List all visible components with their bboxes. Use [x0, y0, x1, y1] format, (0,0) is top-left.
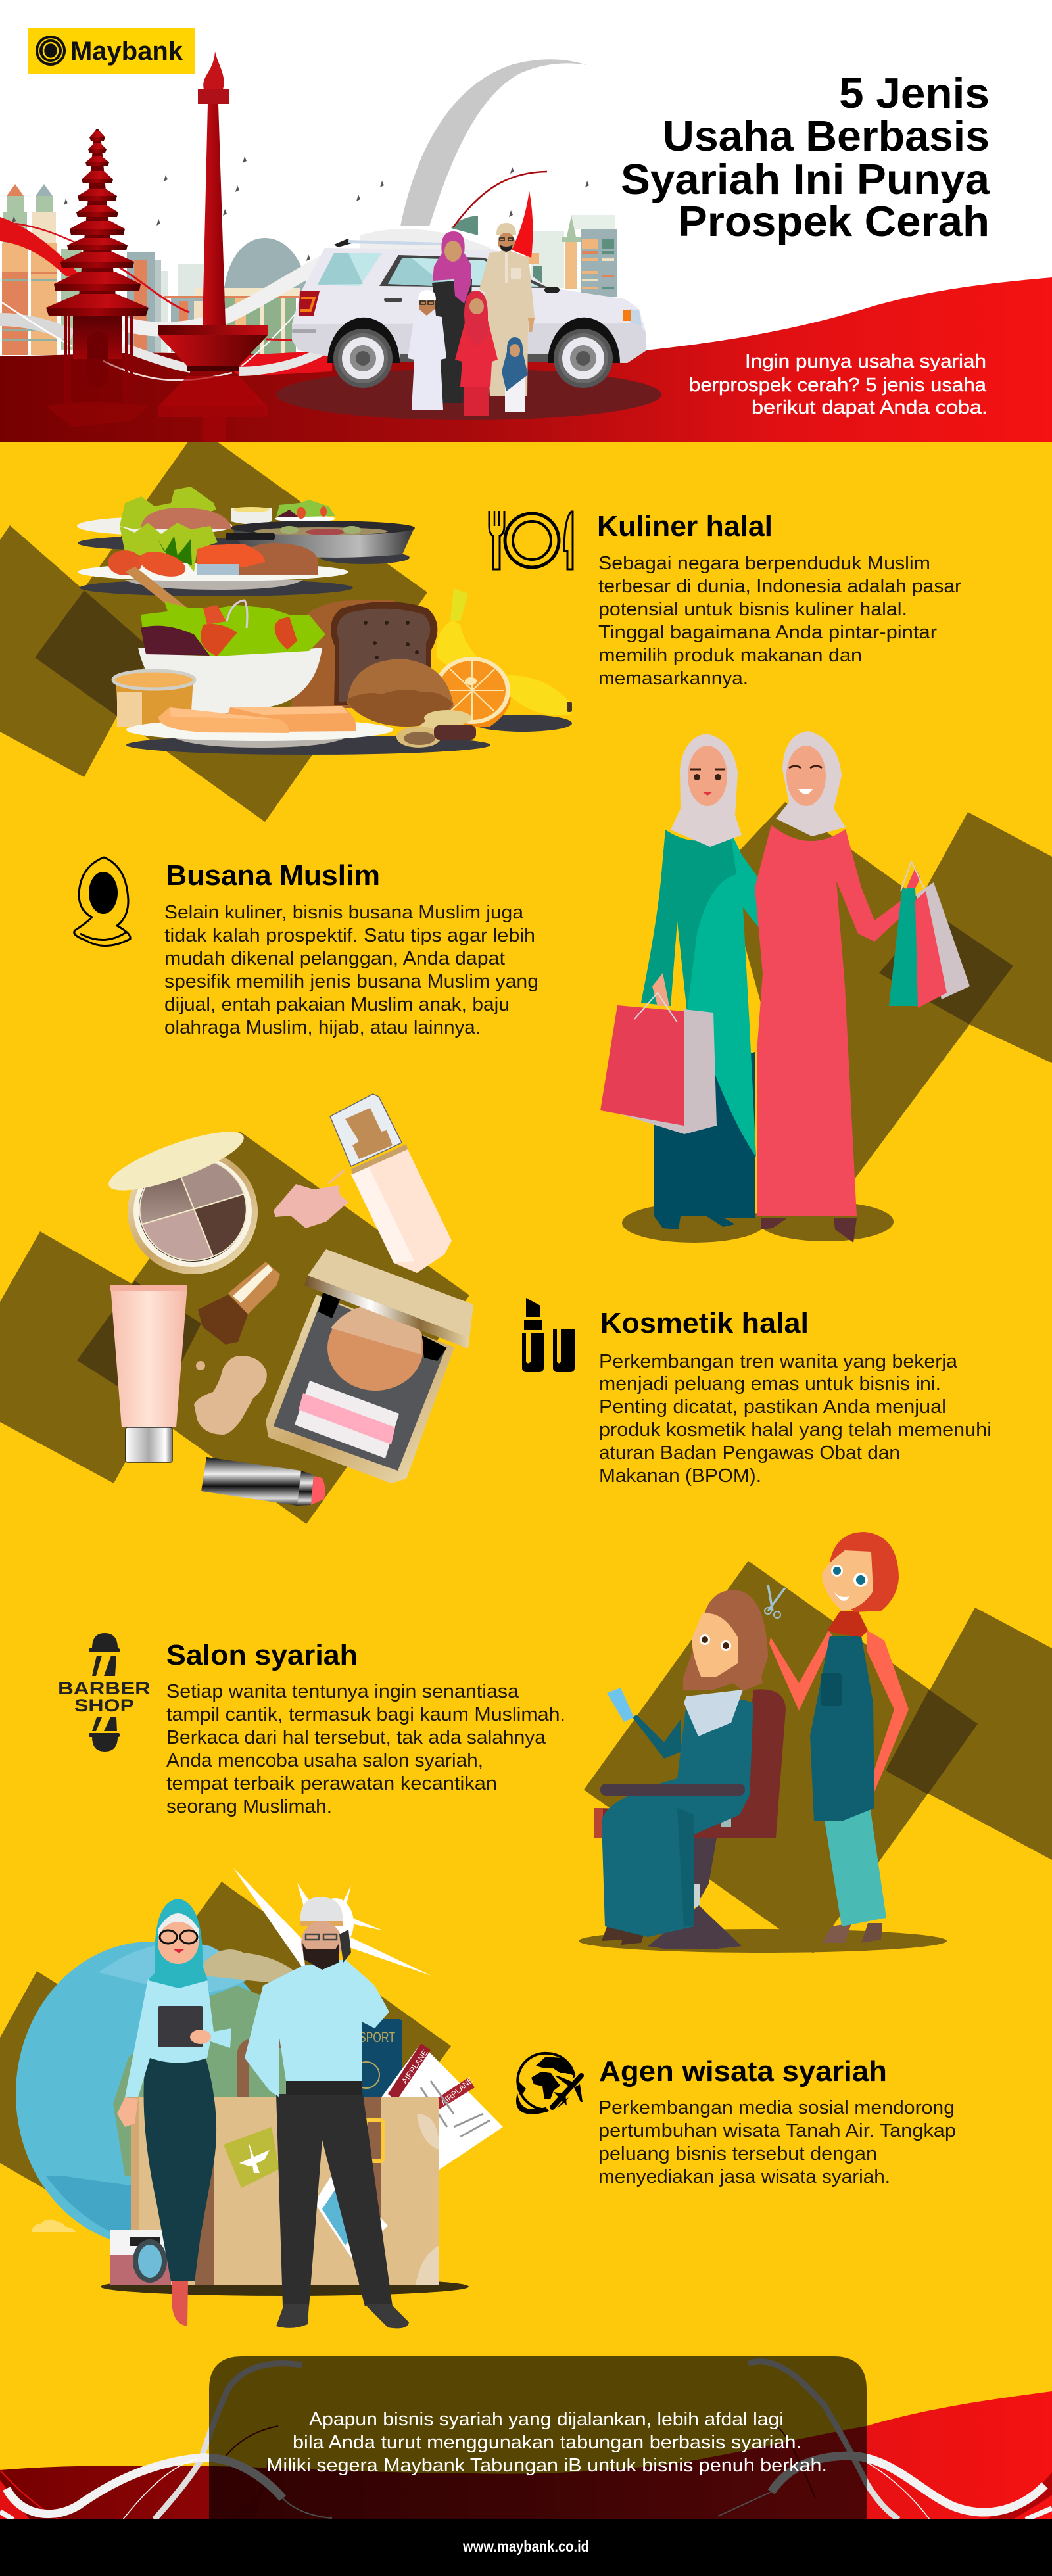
tickets: AIRPLANE — [439, 2075, 475, 2107]
family — [408, 223, 535, 416]
heading: Salon syariah: Salon syariah — [166, 1639, 358, 1671]
salad bowl — [130, 569, 325, 713]
heading: Kuliner halal: Kuliner halal — [597, 510, 773, 542]
stylist — [765, 1532, 909, 1943]
text: Kuliner halal: Sebagai negara berpenduduk Muslim — [598, 553, 930, 574]
text: Kosmetik halal: Penting dicatat, pastikan Anda menjual — [599, 1396, 946, 1418]
closing text: bila Anda turut menggunakan tabungan berbasis syariah. — [293, 2432, 801, 2453]
gray arc — [400, 59, 587, 226]
pink dress woman — [755, 731, 920, 1243]
closing callout panel — [209, 2356, 867, 2519]
ribbons — [0, 217, 332, 380]
eyeshadow compact — [103, 1120, 258, 1274]
intro text: berprospek cerah? 5 jenis usaha — [689, 375, 987, 396]
mother — [432, 231, 472, 403]
illustration: two women shopping — [600, 731, 970, 1243]
text: Salon syariah — [166, 1681, 565, 1817]
top plates — [77, 487, 415, 564]
intro text — [689, 351, 988, 418]
text: Kosmetik halal: produk kosmetik halal yang telah memenuhi — [599, 1419, 992, 1441]
background shapes: salon — [584, 1561, 1052, 1953]
Maybank logo: Maybank — [70, 37, 183, 66]
right skyline — [451, 215, 617, 297]
intro text: Ingin punya usaha syariah — [745, 351, 986, 372]
text: Salon syariah: tampil cantik, termasuk bagi kaum Muslimah. — [166, 1704, 565, 1725]
title: Syariah Ini Punya — [621, 155, 990, 203]
cream tube — [110, 1285, 187, 1462]
juice glass — [113, 671, 195, 727]
icon: barber shop — [58, 1633, 151, 1752]
green dress woman — [641, 734, 778, 1229]
text: Agen wisata syariah: pertumbuhan wisata Tanah Air. Tangkap — [598, 2120, 956, 2141]
text: Agen wisata syariah: Perkembangan media sosial mendorong — [598, 2097, 955, 2118]
heading: Agen wisata syariah: Agen wisata syariah — [599, 2055, 887, 2087]
foundation drop — [194, 1356, 267, 1435]
title: Usaha Berbasis — [663, 112, 990, 160]
makeup brush — [198, 1262, 280, 1345]
bread — [291, 600, 437, 708]
text: Busana Muslim: tidak kalah prospektif. Satu tips agar lebih — [164, 925, 535, 946]
shopping bag left — [600, 993, 717, 1134]
icon: globe and plane — [516, 2053, 583, 2114]
orange — [434, 657, 511, 727]
bottom ribbons — [0, 2362, 1052, 2519]
header panel — [0, 0, 1052, 442]
pagoda — [46, 129, 149, 427]
icon: hijab — [74, 857, 130, 946]
globe — [16, 1942, 299, 2247]
passport — [352, 2019, 402, 2098]
boy — [408, 290, 446, 410]
cream smear — [274, 1170, 348, 1228]
closing text: Apapun bisnis syariah yang dijalankan, lebih afdal lagi — [309, 2409, 784, 2430]
text: Agen wisata syariah: peluang bisnis tersebut dengan — [598, 2143, 877, 2164]
white SUV — [292, 229, 646, 388]
text: Kosmetik halal — [599, 1351, 992, 1487]
background shapes: cosmetics — [0, 1132, 469, 1524]
text: Kuliner halal — [598, 553, 961, 689]
peanuts and dates — [396, 710, 476, 748]
text: Kosmetik halal: Makanan (BPOM). — [599, 1466, 761, 1487]
intro text: berikut dapat Anda coba. — [752, 397, 988, 418]
birds — [12, 156, 589, 261]
small cloud — [32, 2220, 76, 2232]
powder compact — [266, 1249, 473, 1483]
ground ellipse — [276, 369, 661, 420]
background shapes: food — [0, 428, 427, 822]
title: 5 Jenis — [839, 69, 990, 117]
background shapes: travel — [0, 1882, 451, 2275]
illustration: cosmetics — [103, 1094, 473, 1506]
text: Salon syariah: tempat terbaik perawatan kecantikan — [166, 1773, 497, 1794]
title — [621, 69, 990, 245]
icon: lipstick — [522, 1298, 575, 1372]
girl in red — [455, 291, 498, 416]
footer: www.maybank.co.id — [462, 2538, 589, 2555]
sun rays — [233, 1867, 431, 1976]
foundation bottle — [330, 1094, 452, 1273]
Monas monument — [158, 51, 268, 442]
tickets: AIRPLANE — [400, 2048, 430, 2086]
lipstick — [201, 1457, 325, 1506]
text: Salon syariah: Setiap wanita tentunya ingin senantiasa — [166, 1681, 519, 1702]
man traveller — [245, 1897, 409, 2328]
footer — [0, 2519, 1052, 2576]
icon: barber shop: BARBER — [58, 1679, 151, 1698]
heading: Kosmetik halal: Kosmetik halal — [600, 1307, 809, 1339]
text: Busana Muslim: Selain kuliner, bisnis busana Muslim juga — [164, 902, 524, 923]
sausage plate — [126, 706, 490, 755]
seated woman — [600, 1590, 768, 1945]
text: Agen wisata syariah: menyediakan jasa wisata syariah. — [598, 2166, 890, 2187]
bun — [347, 659, 454, 727]
suitcase — [101, 2038, 469, 2296]
text: Salon syariah: Anda mencoba usaha salon syariah, — [166, 1750, 483, 1771]
tickets — [381, 2043, 503, 2170]
shopping bags right — [889, 861, 970, 1008]
bright red ground patch — [217, 352, 332, 376]
right shadow — [473, 715, 572, 732]
text: Kuliner halal: memasarkannya. — [598, 668, 748, 689]
text: Busana Muslim: mudah dikenal pelanggan, Anda dapat — [164, 948, 505, 969]
red thin line and flag — [453, 172, 547, 258]
left skyline — [2, 184, 204, 355]
text: Kuliner halal: memilih produk makanan dan — [598, 645, 862, 666]
text: Busana Muslim: dijual, entah pakaian Muslim anak, baju — [164, 994, 510, 1015]
small girl — [502, 337, 528, 412]
illustration: salon — [579, 1532, 947, 1953]
father — [479, 223, 535, 396]
text: Kosmetik halal: Perkembangan tren wanita yang bekerja — [599, 1351, 958, 1372]
camera — [110, 2230, 171, 2285]
text: Busana Muslim: olahraga Muslim, hijab, atau lainnya. — [164, 1017, 481, 1038]
text: Kosmetik halal: aturan Badan Pengawas Obat dan — [599, 1443, 900, 1464]
red wave — [0, 277, 1052, 442]
dome and mid skyline — [164, 238, 309, 355]
illustration: food — [77, 487, 573, 755]
ground shadow — [579, 1929, 947, 1953]
passport: SPORT — [359, 2029, 395, 2045]
Maybank logo — [28, 28, 195, 74]
illustration: travel — [16, 1867, 503, 2328]
icon: cutlery — [489, 511, 573, 569]
heading: Busana Muslim: Busana Muslim — [166, 859, 380, 892]
closing text: Miliki segera Maybank Tabungan iB untuk bisnis penuh berkah. — [266, 2455, 827, 2476]
banana — [437, 588, 573, 715]
text: Salon syariah: Berkaca dari hal tersebut, tak ada salahnya — [166, 1727, 546, 1748]
woman traveller — [117, 1899, 231, 2326]
title: Prospek Cerah — [678, 197, 990, 245]
bottom red wave — [0, 2391, 1052, 2519]
text: Busana Muslim: spesifik memilih jenis busana Muslim yang — [164, 971, 538, 992]
icon: barber shop: SHOP — [74, 1696, 134, 1715]
chair — [594, 1689, 786, 1949]
text: Salon syariah: seorang Muslimah. — [166, 1796, 332, 1817]
text: Kuliner halal: potensial untuk bisnis kuliner halal. — [598, 599, 907, 620]
background shapes: fashion — [723, 802, 1052, 1223]
text: Agen wisata syariah — [598, 2097, 956, 2187]
text: Kuliner halal: Tinggal bagaimana Anda pintar-pintar — [598, 622, 937, 643]
text: Kuliner halal: terbesar di dunia, Indonesia adalah pasar — [598, 576, 961, 597]
salmon plate — [78, 523, 353, 596]
text: Kosmetik halal: menjadi peluang emas untuk bisnis ini. — [599, 1373, 941, 1395]
closing text — [266, 2409, 827, 2476]
ground shadows — [622, 1202, 894, 1243]
text: Busana Muslim — [164, 902, 538, 1038]
